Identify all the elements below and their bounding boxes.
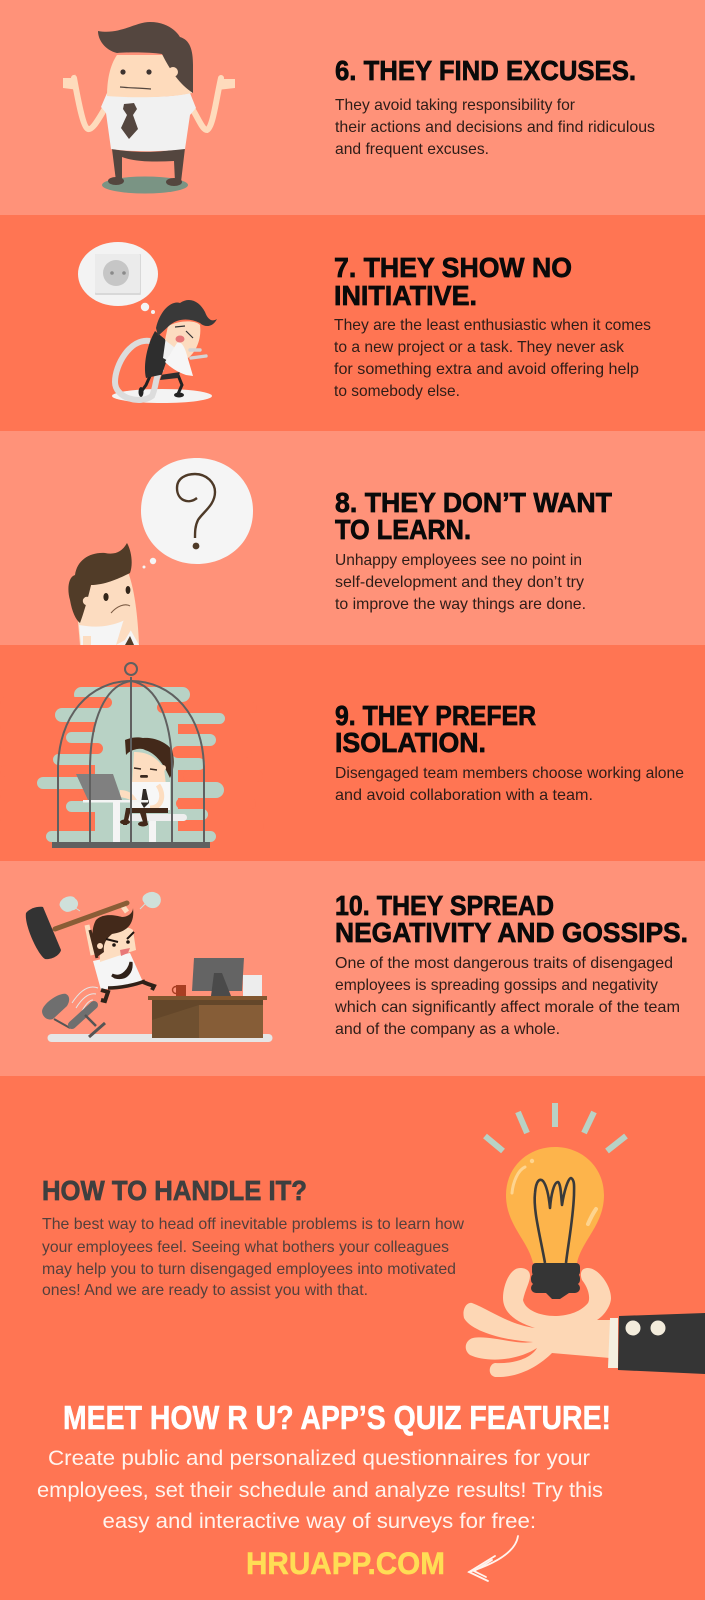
text: trait 7 description xyxy=(334,317,651,400)
heading: trait 8: TO LEARN. xyxy=(335,514,471,545)
text: call to action description: easy and interactive way of surveys for free: xyxy=(102,1510,536,1533)
heading: trait 10: 10. THEY SPREAD xyxy=(335,890,554,921)
text: how to handle it description: The best way to head off inevitable problems is to learn how xyxy=(42,1216,464,1233)
heading: trait 10: NEGATIVITY AND GOSSIPS. xyxy=(335,917,688,948)
text: trait 9 description: and avoid collaboration with a team. xyxy=(335,787,593,804)
panel: trait 10 negativity xyxy=(0,861,705,1076)
panel: trait 7 initiative xyxy=(0,215,705,431)
text: trait 7 description: to a new project or a task. They never ask xyxy=(334,339,625,356)
text: trait 6 description: They avoid taking responsibility for xyxy=(335,97,576,114)
text: trait 10 description: which can significantly affect morale of the team xyxy=(334,999,680,1016)
text: trait 7 description: They are the least enthusiastic when it comes xyxy=(334,317,651,334)
heading: trait 8 xyxy=(335,487,612,545)
heading: trait 9: 9. THEY PREFER xyxy=(335,700,536,731)
text: call to action description: employees, set their schedule and analyze results! Try this xyxy=(37,1479,603,1502)
illustration: thinking man with question bubble xyxy=(68,458,253,645)
text: trait 7 description: for something extra and avoid offering help xyxy=(334,361,639,378)
heading: trait 9 xyxy=(335,700,536,758)
panel: how to handle it and call to action xyxy=(0,1076,705,1600)
illustration: shrugging man xyxy=(63,22,235,194)
text: trait 6 description: their actions and decisions and find ridiculous xyxy=(335,119,655,136)
heading: how to handle it: HOW TO HANDLE IT? xyxy=(42,1175,307,1206)
illustration: man holding plug dreaming of a socket xyxy=(78,242,217,403)
heading: trait 7: INITIATIVE. xyxy=(334,280,477,311)
text: call to action description: Create public and personalized questionnaires for your xyxy=(48,1447,590,1470)
heading: trait 9: ISOLATION. xyxy=(335,727,486,758)
text: trait 10 description: and of the company as a whole. xyxy=(335,1021,560,1038)
heading: trait 6: 6. THEY FIND EXCUSES. xyxy=(335,55,636,86)
text: call to action description xyxy=(37,1447,603,1533)
text: trait 6 description: and frequent excuses. xyxy=(335,141,489,158)
text: how to handle it description: your employees feel. Seeing what bothers your colleagues xyxy=(42,1239,449,1256)
text: how to handle it description: ones! And we are ready to assist you with that. xyxy=(42,1282,368,1299)
text: trait 10 description xyxy=(334,955,680,1038)
heading: call to action: MEET HOW R U? APP’S QUIZ FEATURE! xyxy=(63,1399,611,1436)
text: trait 8 description: Unhappy employees see no point in xyxy=(335,552,582,569)
heading: trait 7 xyxy=(334,252,572,311)
text: trait 8 description: self-development and they don’t try xyxy=(335,574,584,591)
illustration: angry man smashing desk with hammer xyxy=(26,892,272,1042)
text: how to handle it description xyxy=(42,1216,464,1299)
heading: trait 8: 8. THEY DON’T WANT xyxy=(335,487,612,518)
text: how to handle it description: may help you to turn disengaged employees into motivated xyxy=(42,1261,456,1278)
text: trait 6 description xyxy=(335,97,655,158)
text: trait 9 description xyxy=(335,765,684,804)
arrow: pointing to website xyxy=(469,1536,518,1581)
panel: trait 9 isolation xyxy=(0,645,705,861)
text: trait 9 description: Disengaged team members choose working alone xyxy=(335,765,684,782)
panel: trait 6 excuses xyxy=(0,0,705,215)
text: trait 10 description: One of the most dangerous traits of disengaged xyxy=(335,955,673,972)
link: website address: HRUAPP.COM xyxy=(246,1545,445,1581)
panel: trait 8 learning xyxy=(0,431,705,645)
heading: trait 10 xyxy=(335,890,688,948)
text: trait 8 description xyxy=(335,552,586,613)
illustration: man working in a bird cage xyxy=(0,663,264,848)
text: trait 10 description: employees is spreading gossips and negativity xyxy=(335,977,658,994)
heading: trait 7: 7. THEY SHOW NO xyxy=(334,252,572,283)
text: trait 7 description: to somebody else. xyxy=(334,383,460,400)
text: trait 8 description: to improve the way things are done. xyxy=(335,596,586,613)
icon: hand holding light bulb xyxy=(463,1103,705,1377)
